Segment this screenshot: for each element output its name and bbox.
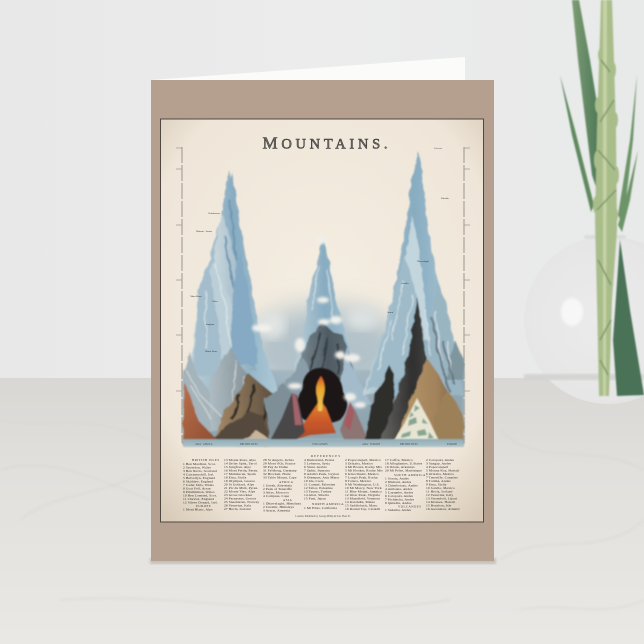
table column 3: Africa and Asia: 1 Dhawalagiri, Himalaya — [263, 502, 301, 506]
peak: brown mountain — [215, 373, 285, 440]
volcano: lava cone — [280, 400, 336, 444]
table column 1: British Isles: 11 Cheviot, England — [183, 497, 214, 502]
table column 6: South America: 20 Mt Pelee, Martinique — [385, 468, 422, 474]
peak: snow streaks — [378, 280, 452, 375]
table column 5: North America continued: 13 Mansfield, Vermont — [345, 496, 380, 502]
table column 1: British Isles: 6 Skiddaw, England — [183, 480, 213, 484]
peak: green and white patterned forest slope — [391, 398, 441, 445]
table column 7: Volcanoes: 16 Ascension, Atlantic — [426, 507, 461, 512]
table column 2: Europe continued: 26 Vesuvius, Italy — [224, 504, 251, 508]
table column 2: Europe continued: 19 Olympus, Greece — [224, 479, 255, 484]
table column 2: Europe continued: 15 Jungfrau, Alps — [224, 465, 251, 470]
table column 6: South America: 3 Chimborazo, Andes — [385, 484, 418, 488]
table column 5: North America continued: 4 Mt Brown, Rocky Mts — [345, 465, 382, 470]
table column 7: Volcanoes: 6 Orizaba, Mexico — [426, 472, 454, 477]
peak: grey foothills — [183, 352, 250, 435]
table column 7: Volcanoes: 10 Jorullo, Mexico — [426, 486, 455, 491]
smoke plumes — [252, 236, 366, 408]
small height labels on the mountains: Jawahir — [401, 282, 409, 285]
table column 3: Africa and Asia: 31 Feldberg, Germany — [263, 468, 297, 474]
volcano and side cones — [252, 236, 368, 444]
table column 6: South America: 17 Coffre, Mexico — [385, 458, 413, 463]
table column 3: Africa and Asia: AFRICA — [279, 480, 294, 484]
peak: secondary snow ridge — [200, 213, 256, 370]
table column 2: Europe continued: 24 Parnassus, Greece — [224, 496, 257, 502]
small height labels on the mountains: Kinchin — [441, 197, 450, 200]
background: wall — [0, 0, 644, 380]
table column 5: North America continued: 12 Otter Peak, Virginia — [345, 493, 380, 498]
title: M OUNTAINS. — [262, 134, 388, 152]
table column 1: British Isles — [183, 458, 220, 512]
table column 6: South America: VOLCANOES — [398, 504, 421, 508]
table column 7: Volcanoes: 13 Stromboli, Lipari — [426, 496, 457, 502]
table column 1: British Isles: 3 Ben Nevis, Scotland — [183, 469, 217, 474]
table column 5: North America continued: 7 Long's Peak, Rocky — [345, 476, 378, 480]
table column 7: Volcanoes: 12 Vesuvius, Italy — [426, 493, 453, 498]
table column 5: North America continued: 16 Round Top, Catskill — [345, 507, 380, 512]
peak: grey blue slope left — [275, 357, 312, 405]
small height labels on the mountains: Jungfrau — [206, 323, 215, 326]
table column 6: South America: SOUTH AMERICA — [394, 473, 426, 477]
table column 3: Africa and Asia: 29 Mont d'Or, France — [263, 462, 296, 466]
table column 6: South America: 19 Ozark, Arkansas — [385, 465, 415, 470]
peak: low blue ridges — [366, 255, 430, 390]
print: paper with frame — [160, 119, 484, 522]
leaf: submerged dark blades — [613, 240, 644, 396]
table column 2: Europe continued: 14 Ortler Spitz, Tyrol — [224, 462, 257, 466]
table column 2: Europe continued: 17 Mulahacen, Spain — [224, 472, 256, 477]
table column 3: Africa and Asia: 3 Ararat, Armenia — [263, 508, 291, 514]
table column 3: Africa and Asia: 33 Table Mount, Cape — [263, 476, 297, 480]
table column 3: Africa and Asia: 3 Atlas, Morocco — [263, 490, 289, 496]
peak: white ridge — [398, 215, 428, 340]
small height labels on the mountains: Dhawalagiri — [417, 260, 429, 263]
stem: grain — [593, 0, 619, 396]
peak: main ice spire — [362, 151, 464, 395]
small height labels on the mountains: Ortler — [212, 300, 218, 303]
table column 6: South America: 7 Pichincha, Andes — [385, 498, 415, 502]
peak: main ice spire — [188, 169, 280, 395]
leaf: tall blade — [572, 0, 598, 190]
card shadow — [150, 558, 496, 564]
table column 6: South America: 1 Sahama, Andes — [385, 508, 412, 513]
table column 5: North America continued: 10 Mt Marcy, New York — [345, 486, 382, 491]
leaf: right thin blades — [618, 75, 638, 232]
table column 4: Asia continued and North America: 1 Mt Elias, California — [304, 506, 337, 511]
table column 7: Volcanoes: 9 Etna, Sicily — [426, 482, 447, 488]
table column 1: British Isles: 8 Goat Fell, Arran — [183, 486, 211, 492]
peak: slate central mountain — [296, 322, 356, 380]
peak: orange foreground — [183, 382, 222, 445]
table column 6: South America: 1 Sorata, Andes — [385, 476, 409, 482]
table column 6: South America: 4 Antisana, Andes — [385, 487, 413, 492]
peak: small dark volcano left — [270, 393, 305, 441]
table column 3: Africa and Asia — [263, 458, 301, 514]
table column 4: Asia continued and North America: 4 Demavend, Persia — [304, 458, 335, 463]
table column 5: North America continued — [345, 458, 383, 512]
mountains: centre group with volcano — [264, 237, 372, 440]
table column 2: Europe continued: 21 Pic du Midi, Pyren. — [224, 486, 258, 491]
table column 6: South America: 6 Cotopaxi, Andes — [385, 494, 414, 499]
table column 6: South America: 18 Alleghanies, U.States — [385, 462, 423, 466]
plant: leaves and grain stem — [560, 0, 644, 396]
table column 7: Volcanoes: 8 Tolima, Andes — [426, 479, 451, 484]
table column 3: Africa and Asia: 28 St Angelo, Ischia — [263, 458, 294, 463]
table column 2: Europe continued: 13 Monte Rosa, Alps — [224, 458, 256, 463]
peak: small red volcanoes right — [340, 402, 368, 442]
table column 2: Europe continued: 22 Monte Viso, Alps — [224, 490, 256, 494]
table column 4: Asia continued and North America: 13 Taurus, Turkey — [304, 490, 332, 494]
table column 1: British Isles: 7 Cader Idris, Wales — [183, 483, 214, 488]
table column 4: Asia continued and North America: 15 Fusi, Japan — [304, 496, 326, 502]
left height scale — [176, 147, 182, 443]
table column 2: Europe continued: 25 Sneehatten, Norway — [224, 500, 259, 505]
table column 7: Volcanoes: 5 Mouna Roa, Hawaii — [426, 468, 459, 474]
card: white back page — [151, 57, 465, 82]
table column 2: Europe continued: 18 Etna, Sicily — [224, 476, 247, 480]
mountains: left massif — [183, 169, 290, 446]
publisher line: London, Published by George Philip & Son, Fleet St. — [295, 515, 351, 518]
peak: grey blue slope behind the left cone — [264, 384, 302, 440]
peak: brown right mountain — [428, 390, 464, 444]
table column 4: Asia continued and North America: 6 Sinai, Arabia — [304, 465, 327, 470]
table column 2: Europe continued: 27 Hecla, Iceland — [224, 507, 251, 512]
table column 2: Europe continued: 16 Mont Perdu, Pyren. — [224, 468, 258, 474]
table column 7: Volcanoes: 3 Sangay, Andes — [426, 462, 452, 466]
table column 3: Africa and Asia: ASIA — [283, 498, 292, 502]
small height labels on the mountains: Illimani · Sorata — [196, 230, 213, 233]
peak: central ice spire — [290, 237, 360, 390]
base strip with region names — [183, 439, 464, 447]
table column 7: Volcanoes: 2 Cotopaxi, Andes — [426, 458, 455, 463]
mist background behind the mountains — [183, 306, 464, 440]
table column 1: British Isles: 10 Ben Lomond, Scot. — [183, 494, 217, 498]
peak: lower snow ridges — [192, 258, 245, 370]
table column 3: Africa and Asia: 2 Jawahir, Himalaya — [263, 505, 294, 510]
table column 1: British Isles: 9 Plinlimmon, Wales — [183, 490, 215, 495]
table column 4: Asia continued and North America: 8 Adam's Peak, Ceylon — [304, 472, 339, 477]
table column 4: Asia continued and North America — [304, 458, 344, 511]
table column 1: British Isles: BRITISH ISLES — [192, 458, 220, 462]
base strip with region names: VOLCANOES — [312, 443, 328, 446]
table column 1: British Isles: 5 Helvellyn, England — [183, 476, 215, 481]
table column 3: Africa and Asia: 32 Brocken, Hartz — [263, 472, 291, 477]
small height labels on the mountains: Chimborazo — [208, 212, 221, 215]
small height labels on the mountains — [190, 147, 450, 353]
table column 5: North America continued: 15 Saddleback, Mass. — [345, 504, 378, 508]
peak: tall dark ridge — [378, 297, 435, 445]
table column 5: North America continued: 11 Blue Mount, Jamaica — [345, 490, 382, 494]
table column 7: Volcanoes: 15 Bourbon, Isle — [426, 504, 452, 508]
small height labels on the mountains: Monte Rosa — [205, 350, 218, 353]
table column 1: British Isles: EUROPE — [196, 504, 211, 508]
table column 5: North America continued: 5 Mt Hooker, Rocky Mts — [345, 468, 383, 474]
base strip with region names: ASIA · EUROPE — [362, 443, 381, 446]
small height labels on the mountains: Ararat — [387, 311, 393, 314]
peak: dark left ridge — [365, 365, 395, 442]
table column 3: Africa and Asia: 4 Compass, Cape — [263, 494, 290, 499]
small height labels on the mountains: Mont Blanc — [190, 295, 202, 298]
table column 3: Africa and Asia: 1 Geesh, Abyssinia — [263, 484, 292, 488]
table column 3: Africa and Asia: 2 Peak of Teneriffe — [263, 487, 292, 491]
table column 7: Volcanoes: 14 Kilauea, Hawaii — [426, 500, 455, 505]
table column 3: Africa and Asia: 30 Puy de Dome — [263, 465, 288, 469]
table column 5: North America continued: 3 Orizaba, Mexico — [345, 462, 373, 466]
table column 6: South America: 8 Quindiu, Andes — [385, 501, 412, 506]
table column 4: Asia continued and North America: 11 Carmel, Palestine — [304, 482, 336, 488]
table column 4: Asia continued and North America: 10 Ida, Crete — [304, 479, 324, 484]
table column 4: Asia continued and North America: 12 Tabor, Palestine — [304, 486, 333, 491]
leaf: left thin blade — [560, 75, 594, 212]
table column 2: Europe continued: 20 St Gothard, Alps — [224, 482, 255, 488]
base strip with region names: ASIA · AFRICA — [195, 443, 213, 446]
table column 6: South America: 5 Cayambe, Andes — [385, 490, 414, 496]
table column 5: North America continued: 14 Katahdin, Maine — [345, 500, 375, 505]
table column 1: British Isles: 1 Ben Macdhui, Scot. — [183, 462, 216, 467]
peak: slate ridges on the right — [432, 318, 455, 392]
table column 5: North America continued: 9 Mt Washington, U.S. — [345, 482, 380, 488]
table column 2: Europe continued: 23 Gross Glockner — [224, 493, 253, 497]
table column 5: North America continued: 6 Iztaccihuatl, Mexico — [345, 472, 379, 477]
card: kraft tan front — [151, 80, 494, 561]
table column 1: British Isles: 2 Snowdon, Wales — [183, 466, 211, 470]
table column 4: Asia continued and North America: 5 Lebanon, Syria — [304, 462, 330, 466]
table column 5: North America continued: 8 Toluca, Mexico — [345, 479, 372, 484]
table column 5: North America continued: 2 Popocatepetl, Mexico — [345, 458, 381, 463]
table column 1: British Isles: 4 Carrantuohill, Irel. — [183, 472, 214, 478]
right height scale — [464, 147, 470, 443]
peak: tan mountain — [395, 358, 464, 442]
table column 4: Asia continued and North America: 7 Ophir, Sumatra — [304, 468, 330, 474]
mountains: right massif — [362, 151, 464, 445]
table column 6: South America — [385, 458, 426, 513]
table column 1: British Isles: 1 Mont Blanc, Alps — [183, 508, 213, 512]
peak: right thin volcano — [333, 345, 372, 405]
table column 7: Volcanoes: 4 Popocatepetl — [426, 465, 448, 469]
table column 1: British Isles: 12 Slieve Donard, Irel. — [183, 500, 218, 506]
small height labels on the mountains: Everest — [434, 147, 442, 150]
base strip with region names: BRITISH ISLES — [400, 443, 418, 446]
volcano: crater cave — [298, 368, 347, 424]
table column 7: Volcanoes: 7 Teneriffe, Canaries — [426, 476, 458, 480]
table column 7: Volcanoes: 11 Hecla, Iceland — [426, 490, 453, 494]
table column 4: Asia continued and North America: NORTH AMERICA — [312, 502, 344, 506]
base strip with region names: EUROPE — [447, 443, 458, 446]
table column 4: Asia continued and North America: 14 Altai, Siberia — [304, 493, 329, 498]
table heading: references: REFERENCES — [311, 454, 341, 458]
background: marble table — [0, 378, 644, 644]
base strip with region names: BRITISH ISLES — [240, 443, 258, 446]
peak: ice streaks — [197, 200, 254, 360]
table column 6: South America: 2 Illimani, Andes — [385, 480, 412, 485]
table column 4: Asia continued and North America: 9 Olympus, Asia Minor — [304, 476, 340, 480]
table column 7: Volcanoes — [426, 458, 461, 512]
table column 2: Europe continued — [224, 458, 259, 512]
vase — [524, 235, 644, 404]
volcano: flame — [316, 376, 325, 411]
